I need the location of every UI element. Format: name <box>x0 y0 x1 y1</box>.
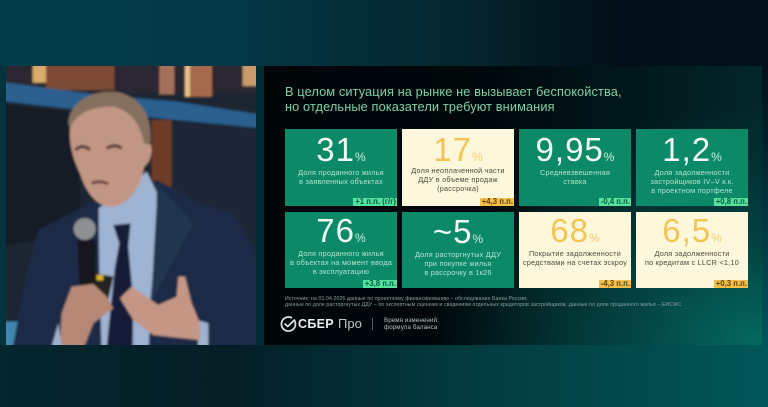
card: 31% <box>285 129 397 206</box>
source note: Источник: на 01.04.2026 данные по проектному финансированию – обследование Банка России, <box>285 296 528 302</box>
card: 6,5% <box>636 212 748 288</box>
tagline: Время изменений: <box>384 317 439 324</box>
card: 76%: 76% <box>316 212 366 249</box>
card: 1,2%: застройщиков IV–V к.к. <box>650 176 734 186</box>
logo: СБЕР Про: Про <box>338 316 362 331</box>
card: 31%: Доля проданного жилья <box>298 168 384 176</box>
card: 1,2%: +0,8 п.п. <box>716 196 747 206</box>
card: ~5% <box>402 212 514 288</box>
card: 31%: в заявленных объектах <box>299 176 383 186</box>
card: 6,5%: +0,3 п.п. <box>716 278 747 288</box>
card: 17%: (рассрочка) <box>437 184 479 193</box>
card: 9,95%: -0,4 п.п. <box>601 196 630 206</box>
card: 1,2%: 1,2% <box>662 131 722 168</box>
card: 17% <box>402 129 514 206</box>
tagline <box>384 317 439 331</box>
card: 1,2%: Доля задолженности <box>654 168 730 176</box>
card: 9,95% <box>519 129 631 206</box>
card: 68% <box>519 212 631 288</box>
card: 9,95%: 9,95% <box>536 131 614 168</box>
card: 1,2% <box>636 129 748 206</box>
source note: данные по доле расторгнутых ДДУ – по экспертным оценкам и сведениям отдельных кредиторов застройщиков, данные по доле проданного жилья – ЕИСЖС <box>285 302 682 308</box>
heading: но отдельные показатели требуют внимания <box>285 99 555 114</box>
card: ~5%: Доля расторгнутых ДДУ <box>415 250 501 259</box>
card: 6,5%: 6,5% <box>662 212 722 249</box>
card: 68%: Покрытие задолженности <box>529 248 621 258</box>
card: 76% <box>285 212 397 288</box>
card: 17%: ДДУ в объеме продаж <box>418 175 498 184</box>
card: 68%: -4,3 п.п. <box>601 278 630 288</box>
card: 17%: +4,3 п.п. <box>482 196 513 206</box>
photo: speaker with microphone <box>6 66 256 345</box>
card: 31%: 31% <box>316 131 366 168</box>
card: ~5%: ~5% <box>433 213 483 250</box>
card: 9,95%: ставка <box>563 176 587 186</box>
card: 31%: +1 п.п. (г/г) <box>355 196 396 206</box>
card: 17%: Доля неоплаченной части <box>411 166 505 175</box>
card: 76%: Доля проданного жилья <box>298 248 384 258</box>
card: 68%: средствами на счетах эскроу <box>523 258 627 266</box>
card: ~5%: в рассрочку в 1к26 <box>424 268 492 277</box>
card: 17%: 17% <box>433 131 483 168</box>
card: 6,5%: по кредитам с LLCR <1,10 <box>645 258 739 266</box>
logo: СБЕР Про: СБЕР <box>298 317 334 331</box>
tagline: формула баланса <box>384 324 437 331</box>
heading <box>285 84 622 114</box>
panel: slide <box>264 66 762 345</box>
card: 76%: в эксплуатацию <box>313 266 369 276</box>
heading: В целом ситуация на рынке не вызывает беспокойства, <box>285 84 622 99</box>
card: 1,2%: в проектном портфеле <box>651 186 733 194</box>
card: 76%: +3,8 п.п. <box>365 278 396 288</box>
logo: СБЕР Про <box>280 316 362 332</box>
card: ~5%: при покупке жилья <box>424 259 492 268</box>
card: 9,95%: Средневзвешенная <box>540 168 610 176</box>
source note <box>285 296 682 308</box>
card: 76%: в объектах на момент ввода <box>290 258 392 266</box>
card: 6,5%: Доля задолженности <box>654 248 730 258</box>
card: 68%: 68% <box>550 212 600 249</box>
